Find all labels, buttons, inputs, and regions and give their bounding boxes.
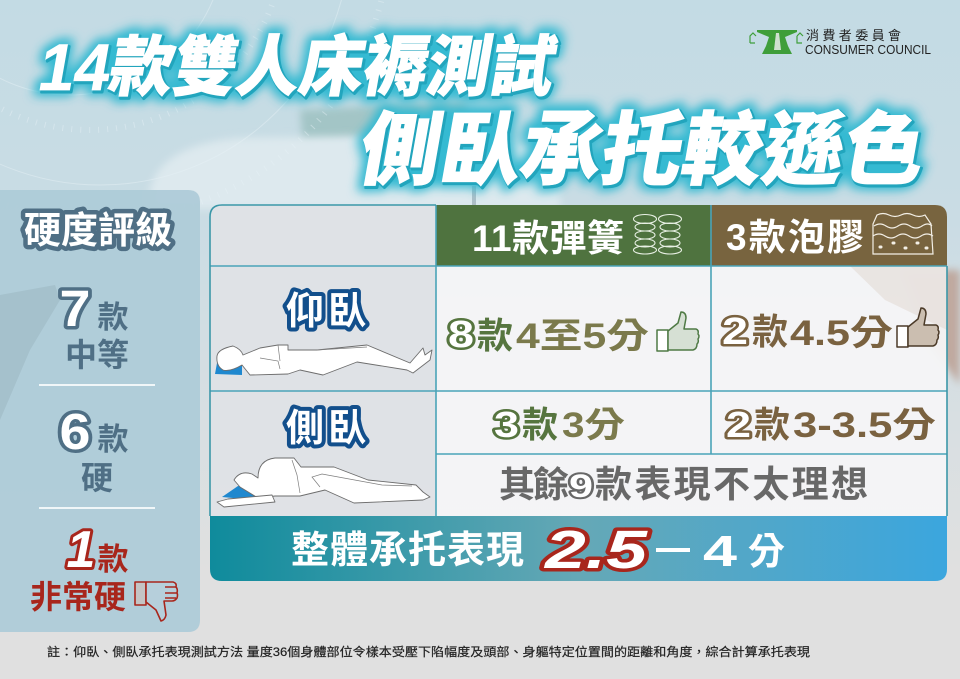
rating: 6 hard: 硬 xyxy=(81,460,113,496)
row label: side-lying xyxy=(217,408,430,507)
logo: consumer council: 消費者委員會 xyxy=(806,28,901,43)
text: remaining 9 models: 款表現不太理想 xyxy=(595,464,868,505)
icon: thumbs up brown xyxy=(897,308,939,347)
cell backgrounds xyxy=(210,205,947,516)
score: 8 spring models 4 to 5: 款 xyxy=(477,315,513,356)
logo: consumer council: CONSUMER COUNCIL xyxy=(805,43,931,57)
table xyxy=(210,205,947,581)
score: 2 foam models 4.5: 4.5分 xyxy=(790,314,893,353)
score: 2 foam models 3-3.5: 2 xyxy=(726,404,751,445)
score: 3 spring models 3: 3 xyxy=(494,404,519,445)
heading: hardness rating: 硬度評級 xyxy=(24,210,172,251)
score: 2 foam models 3-3.5: 款 xyxy=(754,404,790,445)
row label: supine xyxy=(215,291,432,375)
score: 2 foam models 3-3.5: 3-3.5分 xyxy=(793,406,936,445)
row label: supine: 仰臥 xyxy=(286,291,366,333)
title line 1: 14款雙人床褥測試 xyxy=(33,31,561,105)
score: 2 foam models 4.5 xyxy=(722,308,939,353)
header: 11 spring models xyxy=(436,205,711,266)
rating: 1 very hard xyxy=(30,521,178,621)
icon: scales xyxy=(750,30,803,54)
rating: 6 hard: 款 xyxy=(98,422,128,457)
footer bar: overall support: 4 xyxy=(703,527,738,576)
score: 3 spring models 3: 3分 xyxy=(562,406,625,445)
score: 8 spring models 4 to 5: 8 xyxy=(448,314,474,356)
score: 3 spring models 3 xyxy=(494,404,625,445)
score: 8 spring models 4 to 5 xyxy=(448,312,699,356)
panel: hardness rating xyxy=(0,190,200,632)
footer bar: overall support xyxy=(210,516,947,581)
icon: thumbs up green xyxy=(657,312,699,351)
icon: foam xyxy=(873,214,933,254)
icon: side-lying figure xyxy=(217,458,430,507)
footer bar: overall support: 整體承托表現 xyxy=(291,530,524,572)
rating: 7 medium: 7 xyxy=(60,280,90,337)
title line 2: 側臥承托較遜色 xyxy=(354,109,934,198)
score: 3 spring models 3: 款 xyxy=(522,404,558,445)
icon: springs xyxy=(634,214,682,254)
logo: consumer council xyxy=(750,28,931,57)
text: remaining 9 models: 其餘 xyxy=(499,464,569,505)
rating: 1 very hard: 1 xyxy=(67,521,95,579)
rating: 7 medium: 款 xyxy=(98,300,128,335)
row label: side-lying: 側臥 xyxy=(286,408,366,450)
rating: 7 medium xyxy=(60,280,129,373)
score: 2 foam models 3-3.5 xyxy=(726,404,936,445)
header: 3 foam models: 3款泡膠 xyxy=(726,217,864,258)
icon: supine figure xyxy=(215,345,432,375)
title line 2: 側臥承托較遜色 xyxy=(353,107,933,196)
rating: 1 very hard: 款 xyxy=(98,542,128,577)
score: 2 foam models 4.5: 2 xyxy=(722,311,748,353)
text: remaining 9 models: 9 xyxy=(569,468,593,504)
score: 2 foam models 4.5: 款 xyxy=(752,311,788,352)
rating: 6 hard xyxy=(60,403,128,496)
footnote: 註：仰臥、側臥承托表現測試方法 量度36個身體部位令樣本受壓下陷幅度及頭部、身軀特定位置間的距離和角度，綜合計算承托表現 xyxy=(47,644,810,659)
title line 1: 14款雙人床褥測試 xyxy=(35,33,563,107)
score: 8 spring models 4 to 5: 4至5分 xyxy=(516,317,649,356)
rating: 1 very hard: 非常硬 xyxy=(30,579,126,615)
header: 3 foam models xyxy=(711,205,947,266)
rating: 6 hard: 6 xyxy=(60,403,90,460)
title line 1: 14款雙人床褥測試 xyxy=(33,31,561,105)
footer bar: overall support: 分 xyxy=(748,531,785,572)
icon: thumbs down xyxy=(135,582,178,621)
header: 11 spring models: 11款彈簧 xyxy=(472,218,624,259)
title line 2: 側臥承托較遜色 xyxy=(353,107,933,196)
footer bar: overall support: 2.5 xyxy=(544,520,648,580)
rating: 7 medium: 中等 xyxy=(65,337,129,373)
